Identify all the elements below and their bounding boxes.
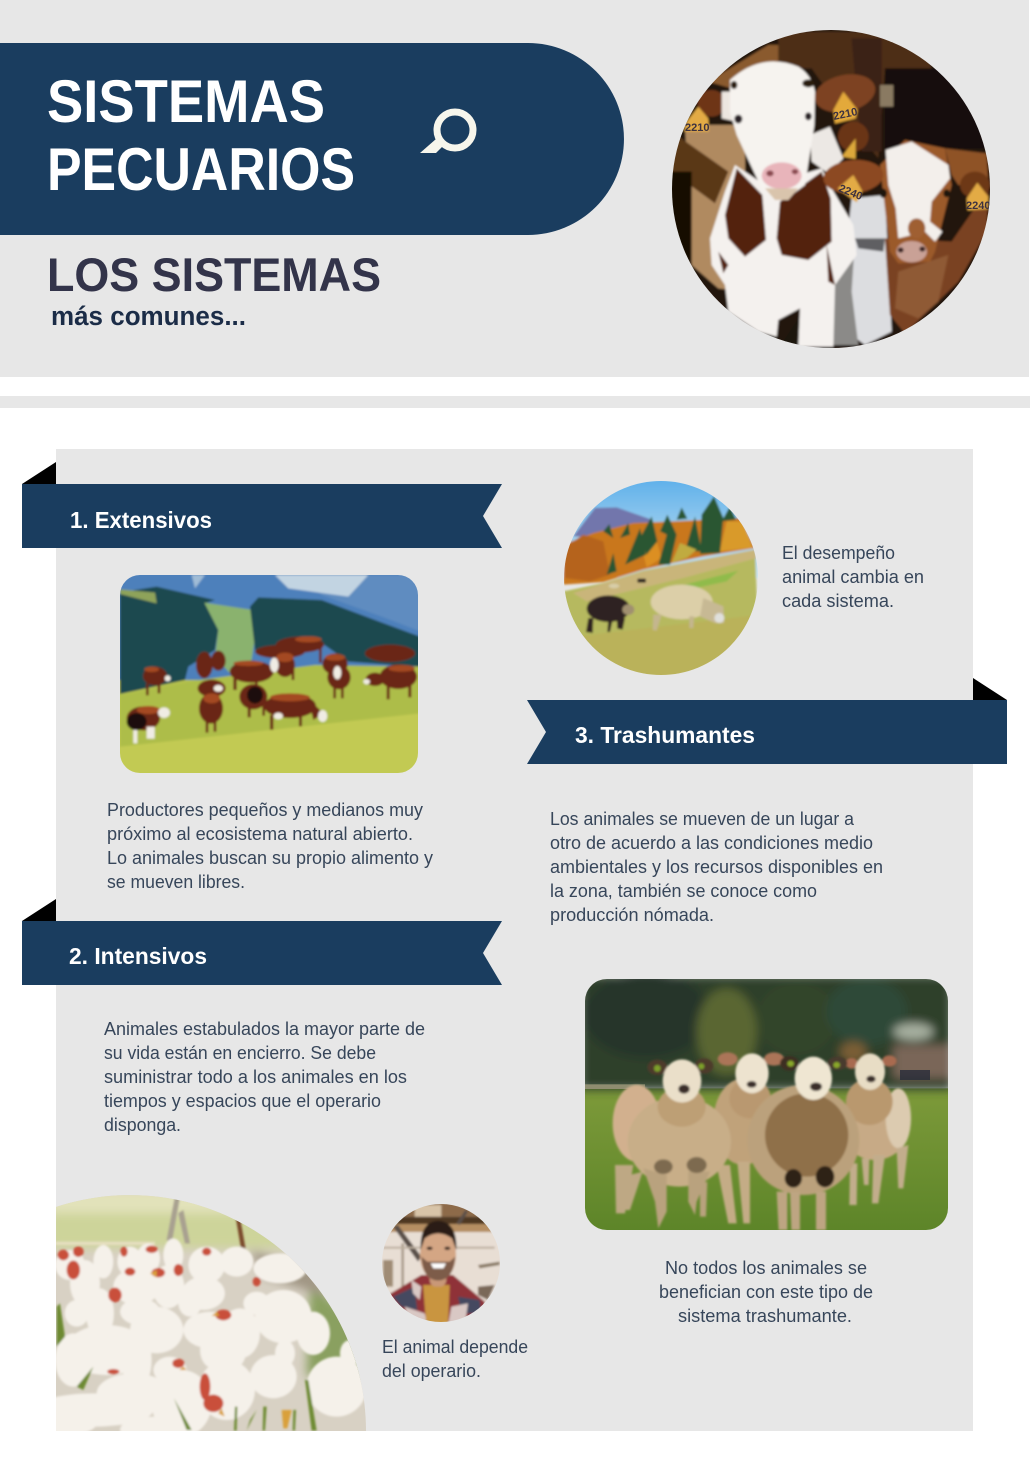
left cow body	[710, 165, 857, 347]
tag numbers: 2210	[832, 106, 859, 123]
heading banner: 1. Extensivos	[22, 462, 502, 548]
text block: intensivos description: Animales estabulados la mayor parte de	[104, 1018, 425, 1039]
text block: intensivos description	[104, 1018, 425, 1135]
heading banner: 3. Trashumantes: 3. Trashumantes	[575, 722, 755, 748]
text block: extensivos description	[107, 799, 434, 892]
icon: magnifying glass	[420, 112, 473, 153]
left front sheep	[628, 1097, 731, 1187]
text block: intensivos description: disponga.	[104, 1114, 181, 1135]
tag numbers	[685, 106, 990, 212]
heading banner: 1. Extensivos: 1. Extensivos	[70, 507, 212, 533]
subtitle: LOS SISTEMAS	[47, 248, 381, 301]
third cow behind	[848, 193, 894, 345]
photo: chickens	[56, 1195, 366, 1431]
title: PECUARIOS	[47, 136, 355, 203]
text block: no todos los animales: No todos los animales se	[665, 1257, 867, 1278]
header background panel	[0, 0, 1029, 377]
far right sheep	[855, 1118, 898, 1161]
text block: intensivos description: su vida están en encierro. Se debe	[104, 1042, 376, 1063]
text block: trashumantes description: otro de acuerdo a las condiciones medio	[550, 832, 873, 853]
text block: no todos los animales	[659, 1257, 873, 1326]
text block: intensivos description: tiempos y espacios que el operario	[104, 1090, 381, 1111]
divider strip	[0, 396, 1030, 408]
text block: extensivos description: se mueven libres.	[107, 871, 245, 892]
text block: no todos los animales: benefician con este tipo de	[659, 1281, 873, 1302]
tag numbers: 2240	[837, 183, 864, 203]
text block: desempeño animal: animal cambia en	[782, 566, 924, 587]
text block: trashumantes description: producción nómada.	[550, 904, 714, 925]
text block: desempeño animal: El desempeño	[782, 542, 895, 563]
text block: animal depende del operario	[382, 1336, 528, 1381]
title	[47, 68, 355, 203]
text block: trashumantes description: la zona, también se conoce como	[550, 880, 817, 901]
panel: main content	[56, 449, 973, 1431]
text block: intensivos description: suministrar todo a los animales en los	[104, 1066, 407, 1087]
text block: trashumantes description: ambientales y los recursos disponibles en	[550, 856, 883, 877]
right cow head	[880, 140, 952, 263]
photo: cows in circle	[665, 25, 995, 355]
heading banner: 3. Trashumantes	[527, 678, 1007, 764]
left rear sheep body	[613, 1085, 661, 1162]
right cow ears	[822, 157, 885, 196]
text block: desempeño animal: cada sistema.	[782, 590, 894, 611]
text block: trashumantes description	[550, 808, 883, 925]
tags	[833, 92, 858, 124]
photo: flock of sheep	[580, 972, 952, 1235]
text block: trashumantes description: Los animales se mueven de un lugar a	[550, 808, 855, 829]
title: SISTEMAS	[47, 68, 325, 135]
photo: smiling farmer	[382, 1204, 500, 1322]
text block: animal depende del operario: del operario.	[382, 1360, 481, 1381]
text block: extensivos description: Lo animales buscan su propio alimento y	[107, 847, 434, 868]
left cow head	[730, 61, 815, 200]
title banner	[0, 43, 624, 235]
center front sheep	[747, 1085, 859, 1195]
text block: no todos los animales: sistema trashumante.	[678, 1305, 852, 1326]
left cow ears	[814, 73, 876, 114]
right cow body	[885, 188, 988, 333]
photo: cattle on hillside	[115, 570, 425, 780]
tag numbers: 2240	[966, 200, 990, 212]
text block: animal depende del operario: El animal depende	[382, 1336, 528, 1357]
back left sheep	[714, 1078, 754, 1165]
text block: extensivos description: próximo al ecosistema natural abierto.	[107, 823, 413, 844]
subtitle	[47, 248, 381, 331]
text block: extensivos description: Productores pequeños y medianos muy	[107, 799, 424, 820]
subtitle: más comunes...	[51, 301, 246, 331]
tag numbers: 2210	[685, 122, 709, 134]
text block: desempeño animal	[782, 542, 924, 611]
photo: sheep in autumn meadow	[560, 478, 760, 678]
heading banner: 2. Intensivos: 2. Intensivos	[69, 943, 207, 969]
heading banner: 2. Intensivos	[22, 899, 502, 985]
